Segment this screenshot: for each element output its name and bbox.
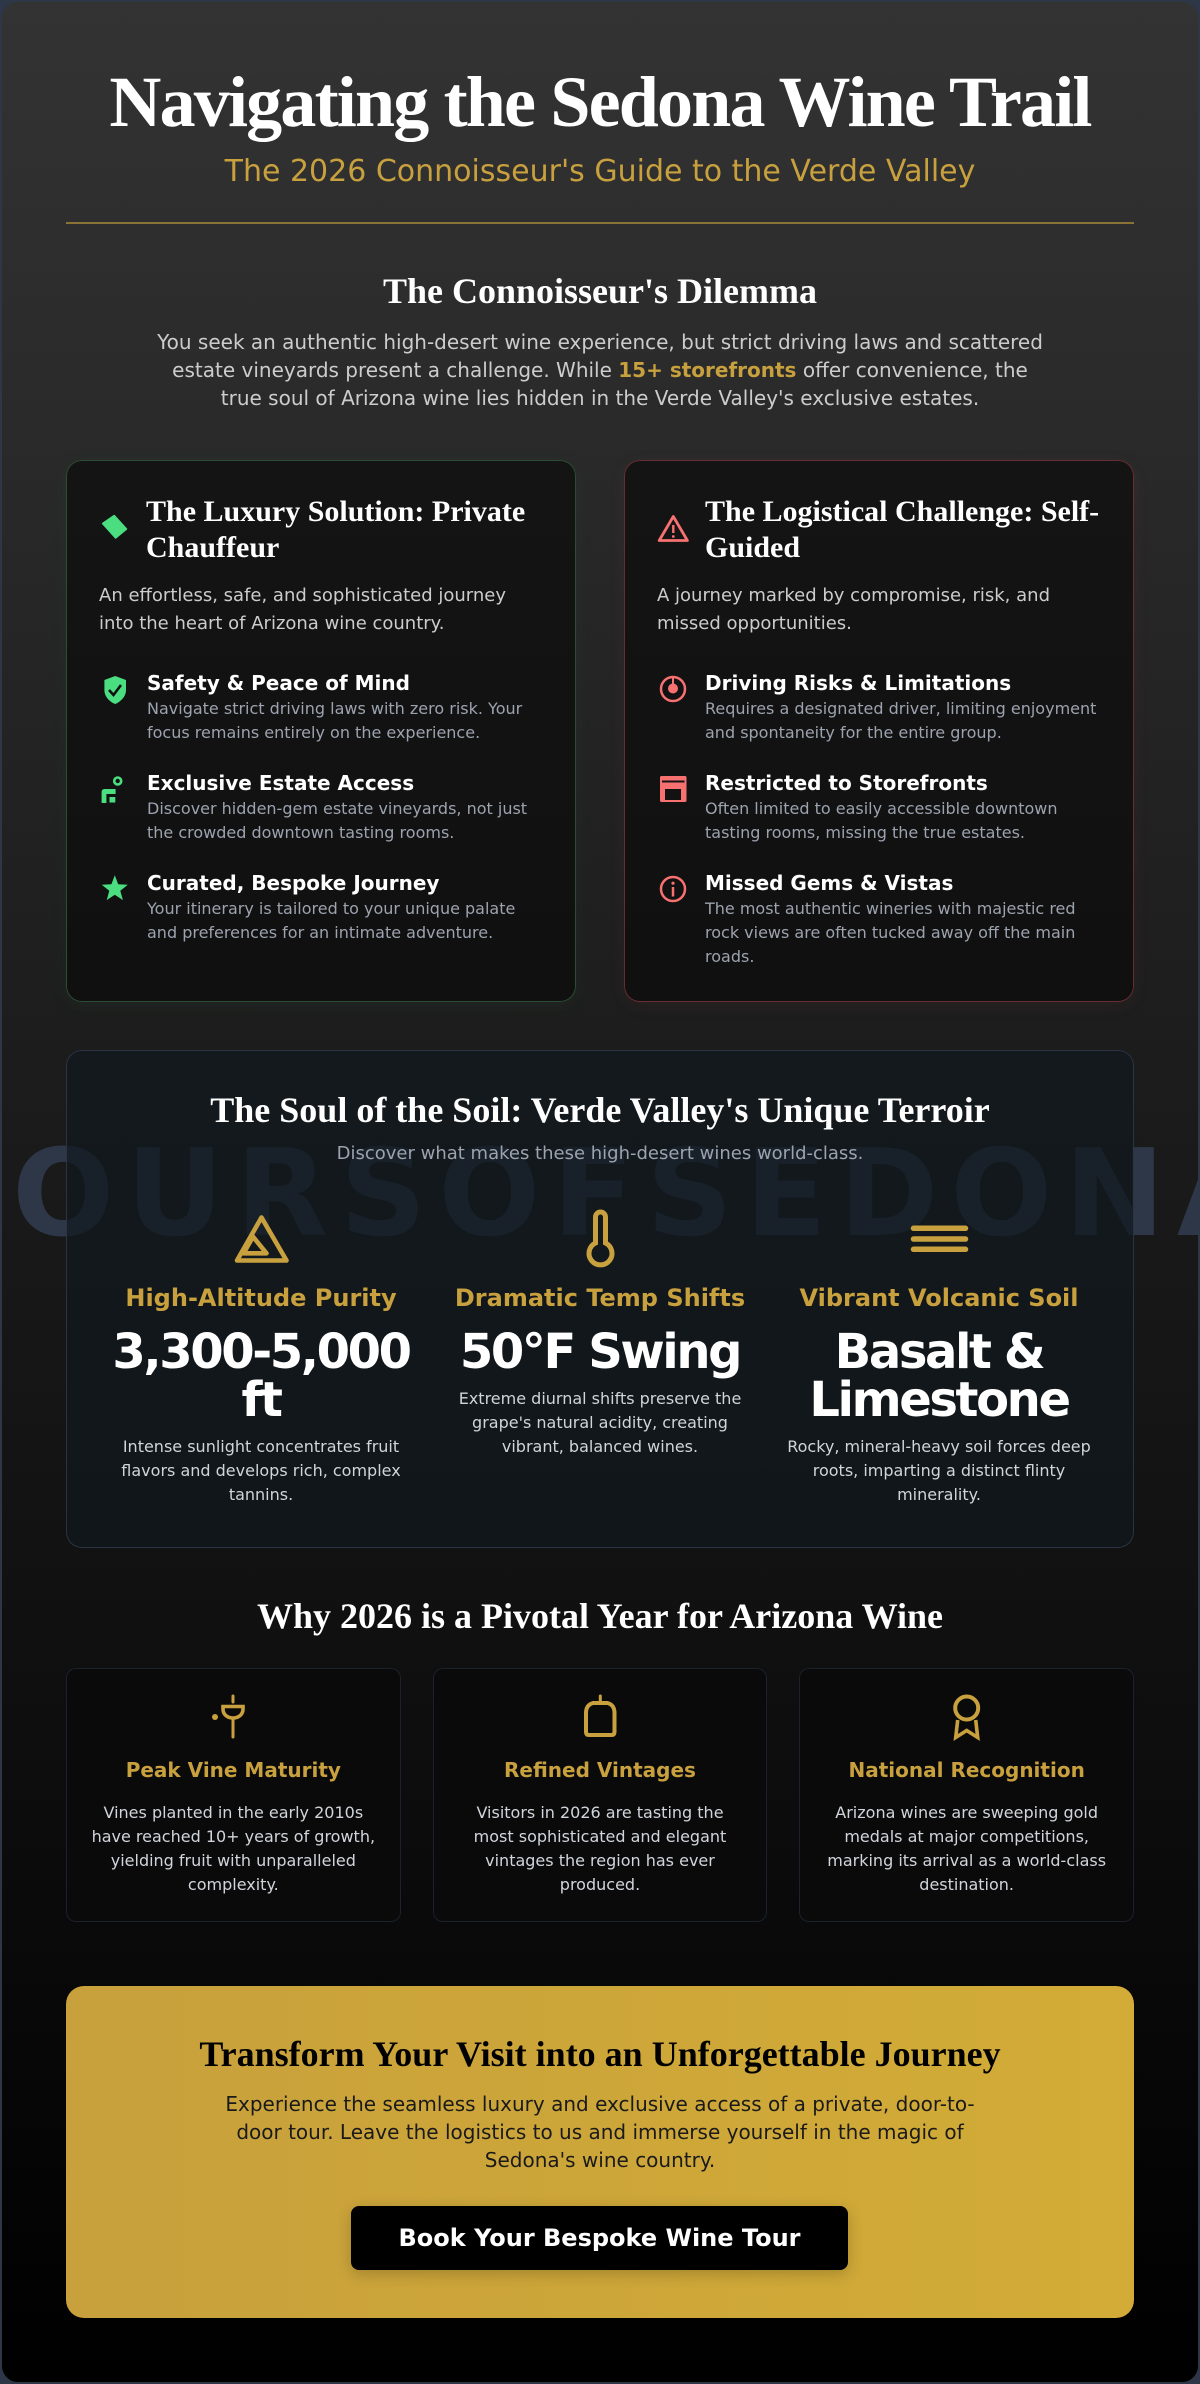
CTA heading: Transform Your Visit into an Unforgettable Journey: [199, 2034, 1001, 2074]
item: storefronts: tasting rooms, missing the true estates.: [705, 823, 1025, 842]
column: altitude: flavors and develops rich, complex: [121, 1461, 401, 1480]
heading: why 2026: Why 2026 is a Pivotal Year for Arizona Wine: [257, 1596, 943, 1636]
CTA paragraph: door tour. Leave the logistics to us and immerse yourself in the magic of: [236, 2120, 964, 2144]
column: soil: [787, 1226, 1091, 1504]
card: peak vine maturity: complexity.: [188, 1875, 279, 1894]
item: curated journey: and preferences for an intimate adventure.: [147, 923, 493, 942]
CTA paragraph: [225, 2092, 975, 2172]
icon: soil layers: [910, 1226, 968, 1252]
column: soil: minerality.: [897, 1485, 981, 1504]
title: Navigating the Sedona Wine Trail: [109, 62, 1091, 142]
icon: vine glass: [212, 1694, 245, 1738]
card: peak vine maturity: Peak Vine Maturity: [126, 1758, 341, 1782]
CTA button: Book Your Bespoke Wine Tour: [398, 2224, 800, 2252]
card: refined vintages: Visitors in 2026 are tasting the: [476, 1803, 724, 1822]
card heading: self-guided: Guided: [705, 531, 800, 564]
item: missed gems: Missed Gems & Vistas: [705, 871, 953, 895]
card heading: self-guided: [658, 495, 1099, 564]
section: the connoisseur's dilemma: [157, 271, 1043, 410]
panel: call to action: [66, 1986, 1134, 2318]
column: soil: Rocky, mineral-heavy soil forces deep: [787, 1437, 1091, 1456]
heading: terroir: The Soul of the Soil: Verde Valley's Unique Terroir: [210, 1090, 990, 1130]
card description: [99, 585, 506, 634]
card: refined vintages: most sophisticated and elegant: [474, 1827, 726, 1846]
column: temperature: [455, 1210, 745, 1456]
panel: luxury solution: [66, 460, 576, 1002]
item: safety: Navigate strict driving laws with zero risk. Your: [147, 699, 522, 718]
item: driving risks: Requires a designated driver, limiting enjoyment: [705, 699, 1096, 718]
dilemma paragraph: You seek an authentic high-desert wine experience, but strict driving laws and scattered: [157, 330, 1043, 354]
CTA button: [351, 2206, 848, 2270]
item: missed gems: [660, 871, 1076, 966]
card: peak vine maturity: yielding fruit with unparalleled: [111, 1851, 356, 1870]
card: national recognition: destination.: [919, 1875, 1014, 1894]
item: storefronts: [660, 771, 1058, 842]
card description: An effortless, safe, and sophisticated journey: [99, 585, 506, 606]
dilemma paragraph: true soul of Arizona wine lies hidden in the Verde Valley's exclusive estates.: [221, 386, 979, 410]
icon: warning triangle: [658, 515, 689, 542]
item: missed gems: rock views are often tucked away off the main: [705, 923, 1075, 942]
column: altitude: ft: [241, 1372, 281, 1428]
column: altitude: 3,300-5,000: [112, 1324, 410, 1380]
icon: estate marker: [102, 776, 122, 803]
card: national recognition: [799, 1668, 1134, 1922]
icon: star: [102, 875, 128, 900]
header: title, subtitle: [109, 62, 1092, 189]
column: soil: Basalt &: [835, 1324, 1043, 1380]
item: driving risks: [660, 671, 1096, 742]
column: temperature: vibrant, balanced wines.: [502, 1437, 698, 1456]
card: national recognition: National Recognition: [848, 1758, 1085, 1782]
column: temperature: 50°F Swing: [460, 1324, 740, 1380]
column: altitude: High-Altitude Purity: [125, 1284, 397, 1312]
item: safety: focus remains entirely on the experience.: [147, 723, 480, 742]
card heading: private chauffeur: [102, 495, 525, 564]
icon: green tag: [102, 514, 128, 539]
column: altitude: [112, 1215, 410, 1504]
column: altitude: tannins.: [229, 1485, 293, 1504]
icon: mountain triangle: [234, 1215, 289, 1263]
item: curated journey: Your itinerary is tailored to your unique palate: [147, 899, 515, 918]
column: soil: roots, imparting a distinct flinty: [813, 1461, 1065, 1480]
card: peak vine maturity: have reached 10+ years of growth,: [92, 1827, 375, 1846]
item: curated journey: [102, 871, 515, 942]
card: peak vine maturity: Vines planted in the early 2010s: [104, 1803, 363, 1822]
card: refined vintages: [433, 1668, 767, 1922]
icon: gauge circle: [660, 676, 686, 702]
item: driving risks: Driving Risks & Limitations: [705, 671, 1011, 695]
panel: logistical challenge: [624, 460, 1134, 1002]
card description: missed opportunities.: [657, 613, 852, 634]
item: safety: Safety & Peace of Mind: [147, 671, 410, 695]
dilemma paragraph: [157, 330, 1043, 410]
icon: shield check: [104, 676, 126, 704]
column: soil: Vibrant Volcanic Soil: [799, 1284, 1079, 1312]
column: temperature: Extreme diurnal shifts preserve the: [459, 1389, 741, 1408]
icon: storefront: [660, 776, 686, 802]
card: refined vintages: produced.: [560, 1875, 640, 1894]
card description: A journey marked by compromise, risk, and: [657, 585, 1050, 606]
column: soil: Limestone: [809, 1372, 1069, 1428]
card: national recognition: medals at major competitions,: [844, 1827, 1089, 1846]
item: storefronts: Often limited to easily accessible downtown: [705, 799, 1058, 818]
column: temperature: Dramatic Temp Shifts: [455, 1284, 745, 1312]
card: national recognition: Arizona wines are sweeping gold: [835, 1803, 1098, 1822]
CTA paragraph: Experience the seamless luxury and exclusive access of a private, door-to-: [225, 2092, 975, 2116]
icon: thermometer: [586, 1210, 614, 1268]
card heading: private chauffeur: Chauffeur: [146, 531, 279, 564]
card description: [657, 585, 1050, 634]
card: national recognition: marking its arrival as a world-class: [827, 1851, 1106, 1870]
card: refined vintages: Refined Vintages: [504, 1758, 696, 1782]
card: refined vintages: vintages the region has ever: [485, 1851, 715, 1870]
panel: terroir: [66, 1050, 1134, 1548]
icon: info circle: [660, 876, 686, 902]
item: curated journey: Curated, Bespoke Journey: [147, 871, 439, 895]
item: estate access: the crowded downtown tasting rooms.: [147, 823, 454, 842]
card heading: private chauffeur: The Luxury Solution: Private: [146, 495, 525, 528]
column: temperature: grape's natural acidity, creating: [472, 1413, 728, 1432]
card heading: self-guided: The Logistical Challenge: Self-: [705, 495, 1099, 528]
item: missed gems: The most authentic wineries with majestic red: [705, 899, 1076, 918]
card description: into the heart of Arizona wine country.: [99, 613, 444, 634]
card: peak vine maturity: [66, 1668, 401, 1922]
terroir subheading: Discover what makes these high-desert wines world-class.: [337, 1143, 863, 1164]
item: estate access: [102, 771, 527, 842]
item: driving risks: and spontaneity for the entire group.: [705, 723, 1002, 742]
item: safety: [104, 671, 522, 742]
heading: dilemma: The Connoisseur's Dilemma: [383, 271, 817, 311]
column: altitude: Intense sunlight concentrates fruit: [123, 1437, 399, 1456]
item: missed gems: roads.: [705, 947, 754, 966]
item: estate access: Exclusive Estate Access: [147, 771, 414, 795]
icon: bottle: [584, 1694, 616, 1737]
item: storefronts: Restricted to Storefronts: [705, 771, 988, 795]
icon: medal: [953, 1694, 980, 1741]
item: estate access: Discover hidden-gem estate vineyards, not just: [147, 799, 527, 818]
dilemma paragraph: estate vineyards present a challenge. While 15+ storefronts offer convenience, the: [172, 358, 1028, 382]
subtitle: The 2026 Connoisseur's Guide to the Verde Valley: [225, 154, 975, 189]
CTA paragraph: Sedona's wine country.: [485, 2148, 715, 2172]
